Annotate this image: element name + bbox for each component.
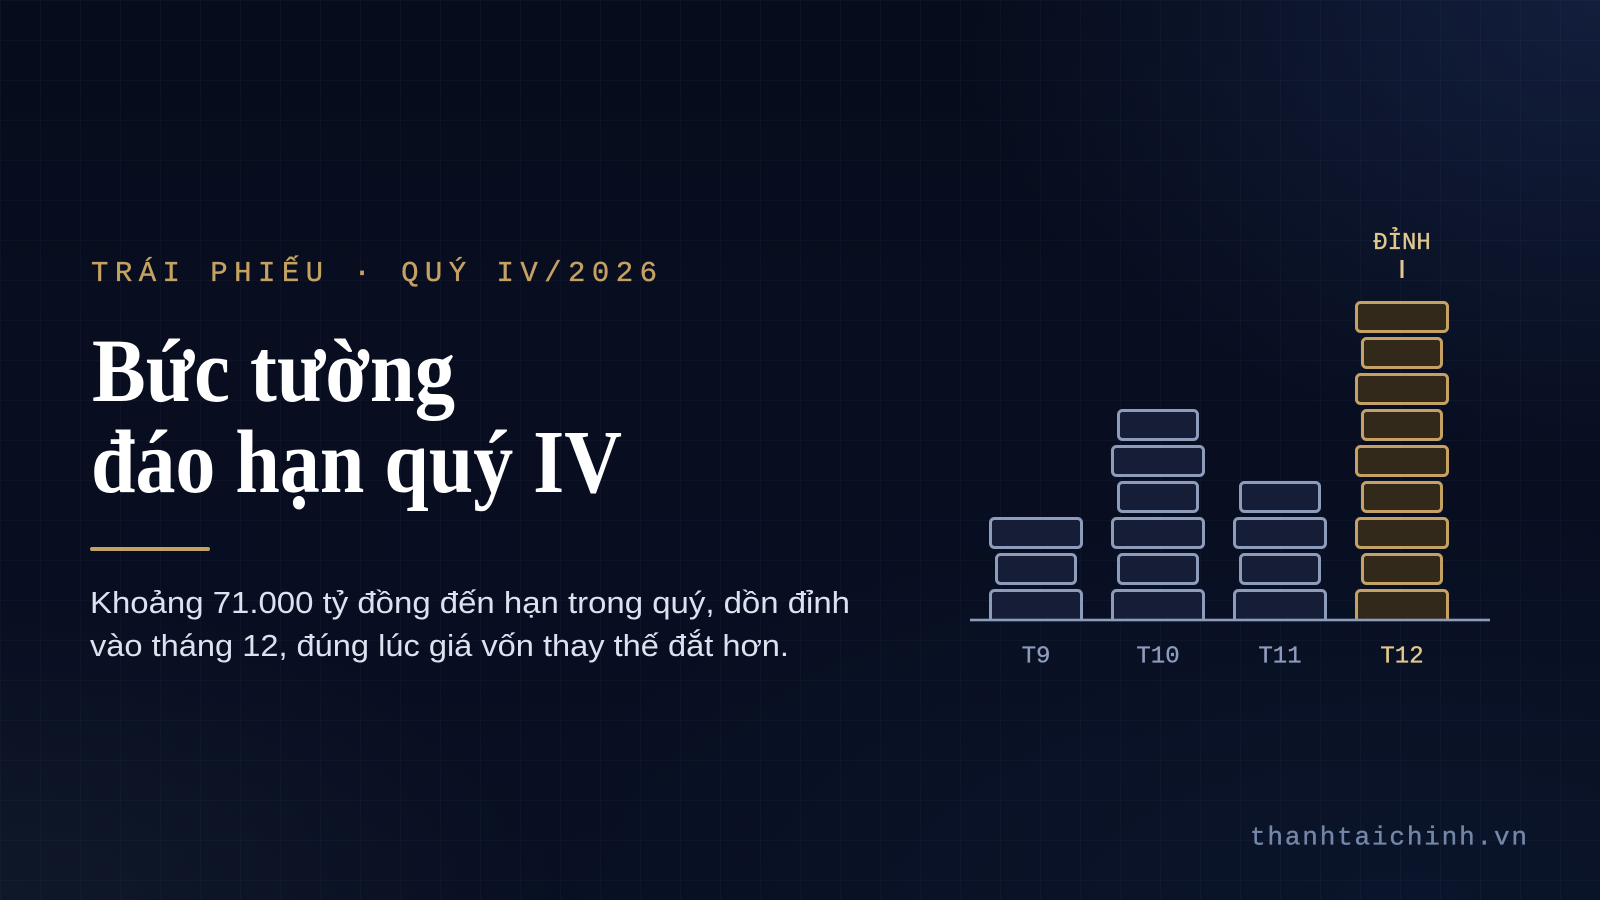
stack: T10 — [1112, 410, 1204, 620]
summary text — [90, 585, 850, 663]
label: T9: T9 — [1022, 644, 1050, 670]
label: T11: T11 — [1258, 644, 1302, 670]
source website: thanhtaichinh.vn — [1250, 822, 1527, 852]
stack: T12 peak — [1356, 302, 1448, 620]
stack: T11 — [1234, 482, 1326, 620]
label: T12: T12 — [1380, 644, 1424, 670]
peak tick marker — [1400, 260, 1404, 278]
label: T10: T10 — [1136, 644, 1180, 670]
eyebrow: topic and period: TRÁI PHIẾU · QUÝ IV/2026 — [91, 254, 657, 290]
stack: T9 — [990, 518, 1082, 620]
peak label: ĐỈNH — [1373, 226, 1431, 257]
title — [91, 322, 622, 512]
summary line 2: vào tháng 12, đúng lúc giá vốn thay thế đắt hơn. — [90, 628, 789, 663]
summary line 1: Khoảng 71.000 tỷ đồng đến hạn trong quý, dồn đỉnh — [90, 585, 850, 620]
title line 2: đáo hạn quý IV — [91, 413, 622, 512]
stacked maturity chart — [970, 226, 1490, 670]
title line 1: Bức tường — [92, 322, 455, 421]
gold divider — [90, 547, 210, 551]
baseline axis — [970, 619, 1490, 621]
